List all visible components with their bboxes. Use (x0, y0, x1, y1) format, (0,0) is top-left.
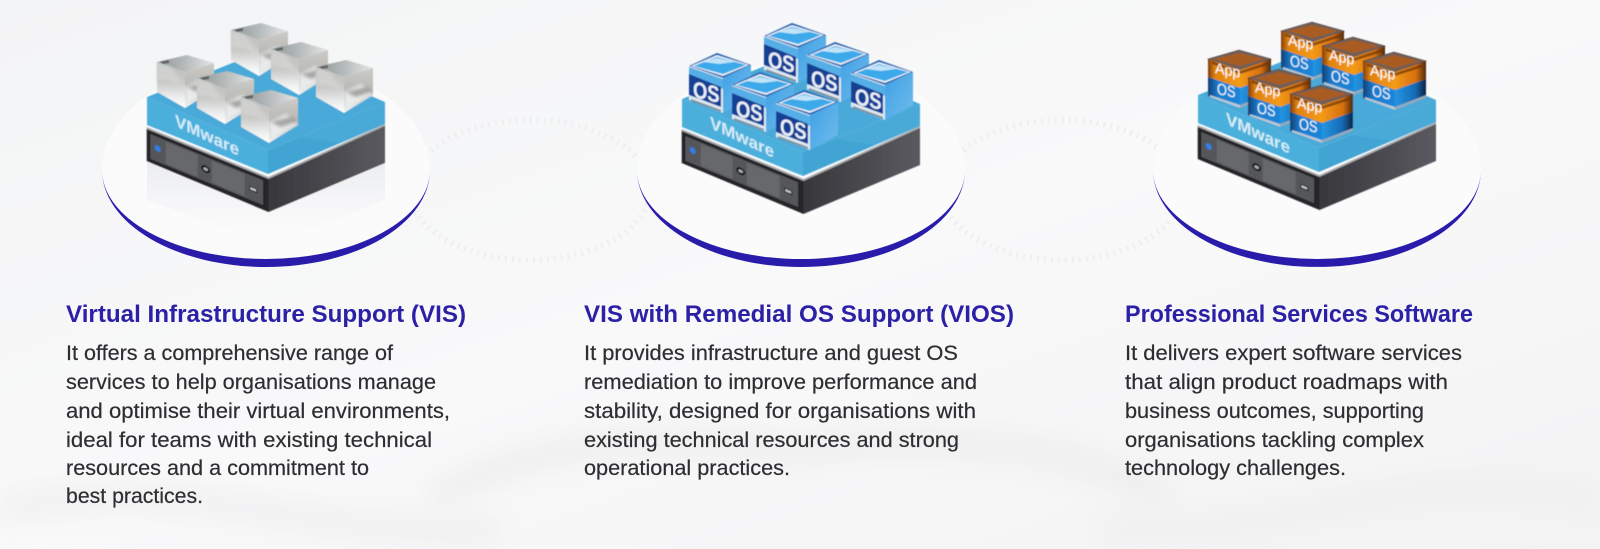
description: operational practices. (584, 457, 790, 480)
description: It offers a comprehensive range of (66, 342, 393, 365)
description: that align product roadmaps with (1125, 371, 1448, 394)
VMware label: VMware (710, 113, 774, 162)
description: existing technical resources and strong (584, 429, 959, 452)
icon: VMware server with empty virtual machines (147, 23, 385, 212)
platform disc (102, 62, 430, 260)
OS cube (776, 90, 838, 150)
VMware label: VMware (175, 111, 239, 160)
App cube: OS (1257, 100, 1276, 121)
App cube: OS (1372, 83, 1391, 104)
platform arc (1153, 170, 1481, 267)
OS cube: OS (780, 114, 807, 145)
App cube: App (1329, 48, 1354, 69)
description: organisations tackling complex (1125, 429, 1425, 452)
App cube: App (1255, 80, 1280, 101)
heading: Professional Services Software (1125, 301, 1473, 328)
OS cube (764, 23, 826, 83)
App cube: App (1215, 61, 1240, 82)
App cube: App (1297, 96, 1322, 117)
OS cube: OS (693, 77, 720, 108)
description: resources and a commitment to (66, 457, 369, 480)
platform arc (102, 170, 430, 267)
server reflection (147, 162, 385, 245)
description: It delivers expert software services (1125, 342, 1462, 365)
OS cube (807, 42, 869, 102)
OS cube (732, 72, 794, 132)
App cube (1363, 52, 1426, 110)
platform arc (637, 170, 965, 267)
description: technology challenges. (1125, 457, 1346, 480)
heading: VIS with Remedial OS Support (VIOS) (584, 301, 1014, 328)
description: best practices. (66, 485, 203, 508)
App cube: OS (1299, 116, 1318, 137)
platform disc (637, 62, 965, 260)
OS cube (851, 60, 913, 120)
description: business outcomes, supporting (1125, 400, 1424, 423)
panel: Professional Services Software (1125, 22, 1481, 480)
icon: VMware server with OS virtual machines (682, 23, 920, 214)
App cube: App (1288, 33, 1313, 54)
OS cube: OS (736, 96, 763, 127)
panel: VIS with Remedial OS Support (584, 23, 1014, 480)
description (584, 342, 977, 480)
description: ideal for teams with existing technical (66, 429, 432, 452)
description: services to help organisations manage (66, 371, 436, 394)
App cube: App (1370, 63, 1395, 84)
OS cube: OS (768, 47, 795, 78)
heading: Virtual Infrastructure Support (VIS) (66, 301, 466, 328)
App cube: OS (1217, 81, 1236, 102)
description: remediation to improve performance and (584, 371, 977, 394)
App cube (1281, 22, 1344, 80)
description (1125, 342, 1462, 480)
icon: VMware server with App and OS virtual machines (1198, 22, 1436, 210)
App cube (1208, 50, 1271, 108)
App cube: OS (1331, 68, 1350, 89)
description (66, 342, 450, 508)
App cube (1248, 69, 1311, 127)
App cube (1322, 37, 1385, 95)
App cube (1290, 85, 1353, 143)
OS cube: OS (811, 66, 838, 97)
VMware label: VMware (1226, 109, 1290, 158)
panel: Virtual Infrastructure Support (66, 23, 466, 508)
OS cube: OS (855, 84, 882, 115)
platform disc (1153, 62, 1481, 260)
description: It provides infrastructure and guest OS (584, 342, 958, 365)
description: stability, designed for organisations with (584, 400, 976, 423)
App cube: OS (1290, 53, 1309, 74)
description: and optimise their virtual environments, (66, 400, 450, 423)
OS cube (689, 53, 751, 113)
